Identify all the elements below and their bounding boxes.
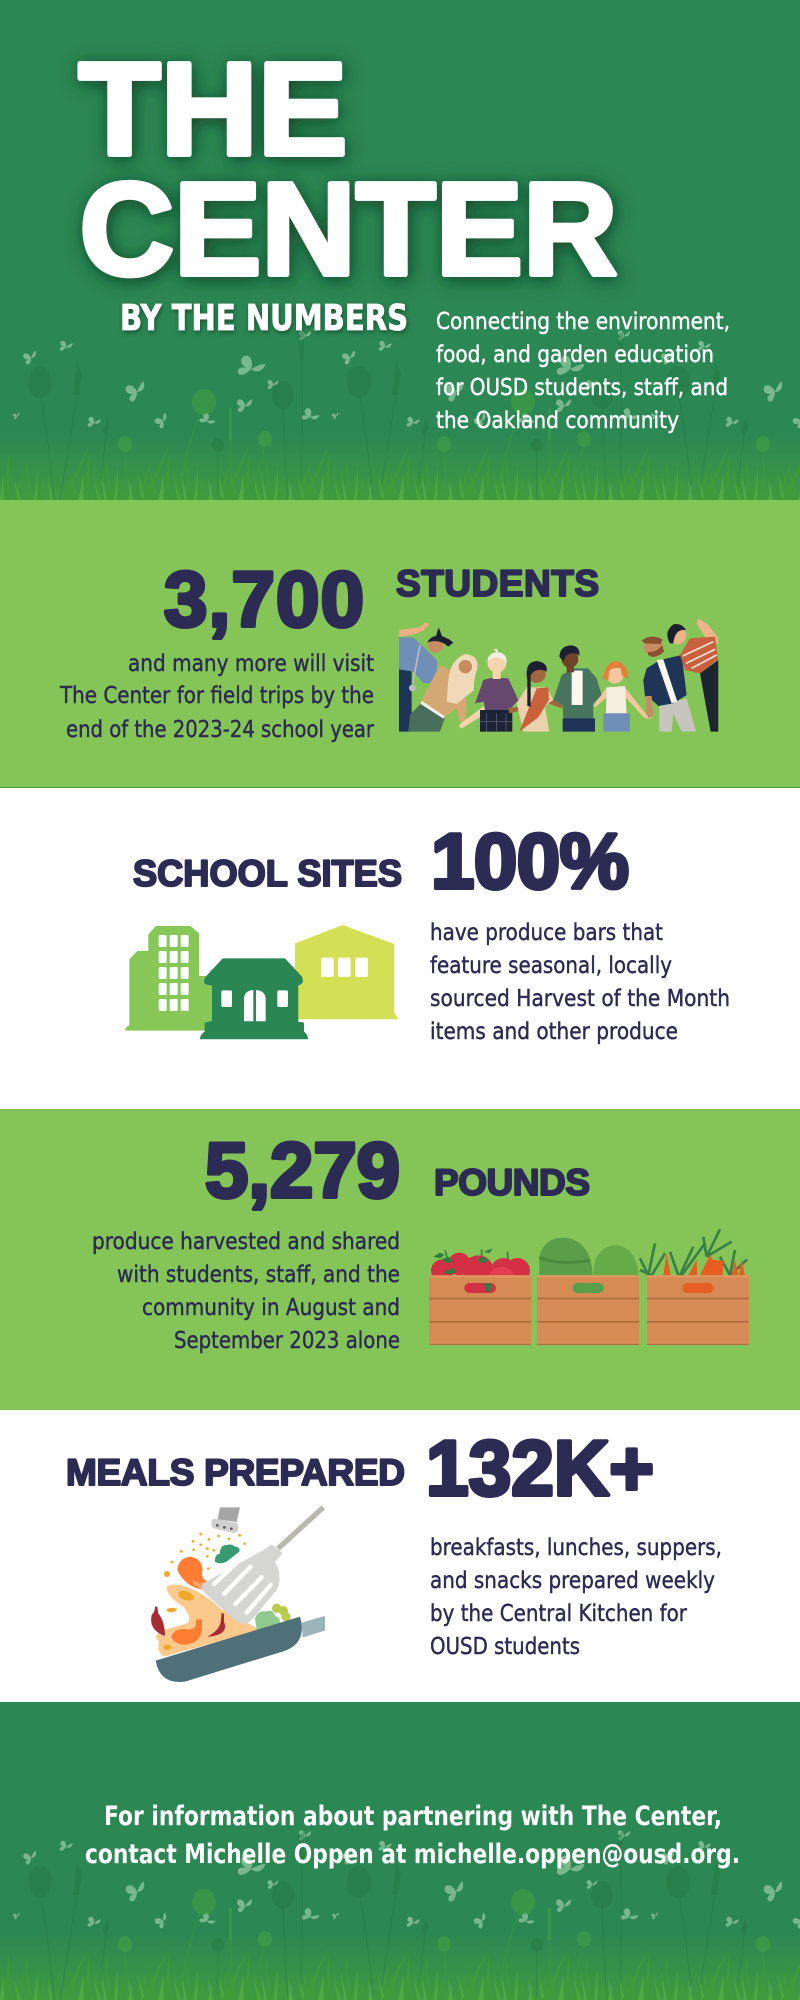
spice dots: [164, 1533, 246, 1613]
person 8: [667, 618, 718, 732]
dark green school: [200, 958, 308, 1039]
students text: The Center for field trips by the: [59, 681, 374, 709]
illustration: pan and spatula: [151, 1507, 325, 1682]
intro text: Connecting the environment,: [436, 307, 730, 335]
person 1: [399, 623, 453, 732]
panel: pounds: [0, 1109, 800, 1410]
school sites text: have produce bars that: [430, 918, 663, 946]
crates: [429, 1275, 749, 1345]
meals text: and snacks prepared weekly: [430, 1566, 715, 1594]
salt shaker: [211, 1507, 240, 1533]
meals text: breakfasts, lunches, suppers,: [430, 1533, 722, 1561]
meals text: [430, 1533, 722, 1660]
person 6: [593, 661, 652, 732]
person 4: [508, 661, 563, 732]
panel: meals prepared: [0, 1410, 800, 1702]
illustration: group of students: [399, 618, 718, 732]
intro text: [436, 307, 730, 434]
cabbages: [539, 1238, 639, 1275]
person 2: [408, 654, 478, 732]
meals text: by the Central Kitchen for: [430, 1599, 687, 1627]
heading: school sites: SCHOOL SITES: [133, 853, 402, 894]
person 7: [642, 637, 696, 732]
pounds text: September 2023 alone: [174, 1326, 400, 1354]
subtitle: by the numbers: BY THE NUMBERS: [120, 298, 408, 339]
school sites text: [430, 918, 730, 1045]
illustration: produce crates: [429, 1229, 749, 1345]
person 5: [553, 645, 602, 732]
panel: school sites: [0, 788, 800, 1109]
intro text: food, and garden education: [436, 340, 714, 368]
students text: and many more will visit: [128, 649, 374, 677]
pounds text: community in August and: [142, 1293, 400, 1321]
panel: footer: [0, 1702, 800, 2000]
panel: header: [0, 0, 800, 500]
grass and butterfly meadow: [0, 328, 800, 500]
light green tower: [125, 926, 213, 1031]
icon: school buildings: [125, 925, 398, 1039]
stat: 100%: 100%: [431, 817, 629, 905]
yellow building: [295, 925, 398, 1019]
stat: 132K+: 132K+: [426, 1424, 654, 1512]
pounds text: [92, 1227, 400, 1354]
food: [151, 1544, 260, 1657]
stat: 5,279: 5,279: [205, 1126, 400, 1214]
pounds text: produce harvested and shared: [92, 1227, 400, 1255]
title: THE CENTER: CENTER: [80, 156, 618, 302]
intro text: for OUSD students, staff, and: [436, 373, 728, 401]
pounds text: with students, staff, and the: [117, 1260, 400, 1288]
intro text: the Oakland community: [436, 406, 679, 434]
school sites text: feature seasonal, locally: [430, 951, 672, 979]
school sites text: sourced Harvest of the Month: [430, 984, 730, 1012]
spatula: [202, 1507, 323, 1624]
meals text: OUSD students: [430, 1632, 580, 1660]
heading: pounds: POUNDS: [434, 1162, 590, 1203]
title: THE CENTER: THE: [78, 36, 348, 182]
tomatoes: [431, 1248, 530, 1293]
heading: students: STUDENTS: [396, 563, 599, 604]
grass and butterfly meadow: [0, 1828, 800, 2000]
students text: [59, 649, 374, 743]
school sites text: items and other produce: [430, 1017, 678, 1045]
person 3: [459, 649, 518, 732]
carrots: [640, 1229, 747, 1275]
heading: meals prepared: MEALS PREPARED: [66, 1452, 405, 1493]
panel: students: [0, 500, 800, 788]
title: THE CENTER: [78, 36, 618, 302]
footer contact text: [85, 1801, 740, 1870]
stat: 3,700: 3,700: [164, 555, 364, 643]
frying pan: [156, 1616, 325, 1682]
students text: end of the 2023-24 school year: [66, 715, 374, 743]
greens: [255, 1604, 291, 1630]
